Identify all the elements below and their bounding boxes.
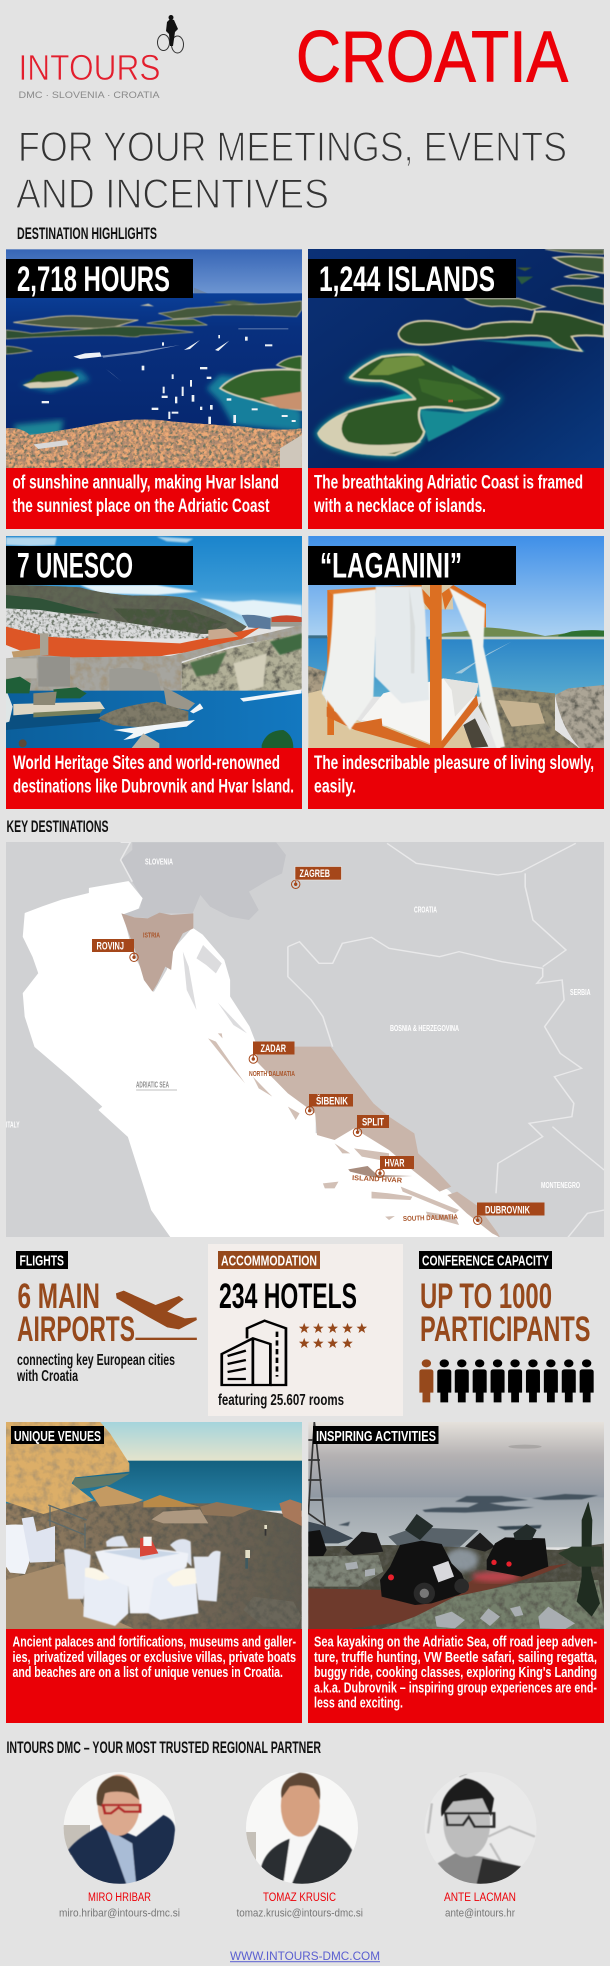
icon: people row [419,1359,594,1402]
panel: conference capacity [419,1251,594,1402]
portrait [426,1774,536,1884]
panel: 7 UNESCO [6,536,303,809]
name and email [444,1892,516,1920]
text: connecting cities: connecting key European cities [17,1352,175,1369]
website link: WWW.INTOURS-DMC.COM [230,1949,380,1963]
panel: inspiring activities [308,1422,607,1723]
caption [308,1629,604,1723]
pylon [308,1422,325,1525]
pin: Zagreb: ZAGREB [300,868,330,880]
pin: Rovinj: ROVINJ [96,940,124,952]
pin: Sibenik [306,1094,353,1115]
pin: Split [353,1115,389,1137]
name and email: ante@intours.hr [445,1908,515,1920]
icon: airplane [116,1291,197,1340]
caption: of sunshine annually, making Hvar Island [12,472,279,494]
text: connecting cities: with Croatia [16,1368,78,1385]
caption: Ancient palaces and fortifications, museums and galler- [12,1634,296,1650]
tag: flights [16,1251,68,1270]
caption: less and exciting. [314,1694,403,1712]
map region: Dalmatia [257,1047,451,1192]
map labels: countries and seas: ITALY [6,1120,20,1130]
name and email: ANTE LACMAN [444,1892,516,1904]
pin: Split: SPLIT [362,1116,384,1128]
pin: Hvar [376,1156,414,1178]
pin: Zadar [249,1042,294,1063]
caption [308,468,604,529]
panel: flights [16,1251,197,1385]
panel: accommodation [208,1244,403,1416]
panel: 1,244 islands [308,249,604,529]
label: Laganini: “LAGANINI” [320,546,462,586]
icon: cyclist [158,15,184,53]
tag: unique venues: UNIQUE VENUES [14,1428,101,1445]
tag: conference capacity: CONFERENCE CAPACITY [422,1252,549,1270]
statistic: 6 main airports: 6 MAIN [18,1277,100,1316]
caption: easily. [314,776,356,798]
buggies [308,1530,548,1605]
name and email [59,1892,180,1920]
map labels: countries and seas: SLOVENIA [145,858,173,866]
map labels: countries and seas: ADRIATIC SEA [136,1080,169,1090]
cypress [577,1502,600,1617]
heading: key destinations: KEY DESTINATIONS [6,817,108,836]
label: 1,244 islands: 1,244 ISLANDS [319,260,495,299]
photo: heart-shaped island [308,249,604,468]
statistic: 234 hotels: 234 HOTELS [219,1277,357,1316]
caption [6,468,302,529]
pin: Dubrovnik: DUBROVNIK [485,1204,530,1216]
photo: Hvar harbour [6,249,303,469]
caption: and beaches are on a list of unique venues in Croatia. [12,1664,283,1681]
caption: the sunniest place on the Adriatic Coast [12,496,270,517]
icon: star rating [299,1323,367,1348]
logo: Intours: DMC · SLOVENIA · CROATIA [18,90,160,100]
tag: flights: FLIGHTS [20,1252,64,1270]
caption: ies, privatized villages or exclusive villas, private boats [12,1649,296,1666]
map labels: regions: SOUTH DALMATIA [403,1214,458,1223]
caption: with a necklace of islands. [313,496,486,517]
contact: Ante Lacman [426,1774,536,1918]
logo: Intours: INTOURS [18,47,160,88]
heading: regional partner: INTOURS DMC – YOUR MOST TRUSTED REGIONAL PARTNER [6,1739,321,1757]
contact: Miro Hribar [59,1770,180,1920]
map region: Slovenia [121,842,286,920]
tag: unique venues [11,1426,104,1445]
map region: South Dalmatia [447,1192,500,1237]
logo: Intours [18,15,184,100]
caption [6,748,302,809]
caption: World Heritage Sites and world-renowned [13,753,280,774]
map labels: countries and seas: SERBIA [570,988,591,997]
tag: inspiring activities [313,1426,438,1445]
tag: accommodation: ACCOMMODATION [221,1252,317,1270]
map region: Adriatic Sea [23,882,498,1237]
pin: Rovinj [92,939,138,962]
text: connecting cities [16,1352,175,1385]
portrait [60,1770,180,1886]
header [16,15,568,217]
tag: inspiring activities: INSPIRING ACTIVITIES [316,1428,436,1445]
name and email [236,1892,363,1920]
statistic: 6 main airports: AIRPORTS [17,1310,135,1349]
heading: destination highlights: DESTINATION HIGHLIGHTS [17,224,157,243]
icon: hotel building [222,1321,286,1385]
map: key destinations [6,842,604,1237]
subtitle [16,123,567,217]
photo: Dubrovnik walls [6,536,303,749]
pin: Zagreb [292,866,342,888]
pin: Zadar: ZADAR [260,1043,286,1055]
caption [308,748,604,809]
map labels: regions: ISTRIA [143,932,160,940]
map labels: countries and seas: CROATIA [414,906,437,914]
name and email: miro.hribar@intours-dmc.si [59,1908,180,1920]
photo: seaside daybed [308,536,605,750]
map region: Istria [121,913,193,992]
tag: accommodation [218,1251,320,1270]
statistic: participants [420,1277,590,1349]
map labels: regions: ISLAND HVAR [352,1175,402,1185]
panel: 2,718 hours [6,249,303,529]
map labels: regions: NORTH DALMATIA [249,1071,295,1078]
text: rooms: featuring 25.607 rooms [218,1392,344,1409]
tag: conference capacity [419,1251,552,1270]
pin: Sibenik: ŠIBENIK [316,1094,348,1108]
panel: Laganini [308,536,605,809]
photo: buggy safari at dusk [308,1422,607,1630]
canopy [422,585,453,609]
map labels: regions [143,932,458,1223]
pin: Dubrovnik [474,1202,544,1225]
name and email: tomaz.krusic@intours-dmc.si [236,1908,363,1920]
panel: unique venues [6,1422,303,1723]
name and email: TOMAZ KRUSIC [263,1892,336,1904]
subtitle: AND INCENTIVES [16,170,329,217]
pin: Hvar: HVAR [384,1158,405,1170]
portrait [240,1770,360,1886]
map labels: countries and seas: MONTENEGRO [541,1181,580,1190]
caption: destinations like Dubrovnik and Hvar Island. [13,776,294,798]
contact: Tomaz Krusic [236,1770,363,1920]
photo: seaside banquet [6,1422,303,1631]
statistic: 6 main airports [17,1277,135,1349]
map region: Island Hvar [348,1166,412,1177]
map labels: countries and seas [6,858,591,1190]
label: 2,718 hours: 2,718 HOURS [17,260,170,299]
label: 7 UNESCO: 7 UNESCO [17,546,133,586]
name and email: MIRO HRIBAR [88,1892,151,1904]
statistic: participants: UP TO 1000 [420,1277,552,1316]
title: Croatia: CROATIA [296,18,568,98]
map labels: countries and seas: BOSNIA & HERZEGOVINA [390,1024,459,1033]
caption [6,1629,302,1723]
